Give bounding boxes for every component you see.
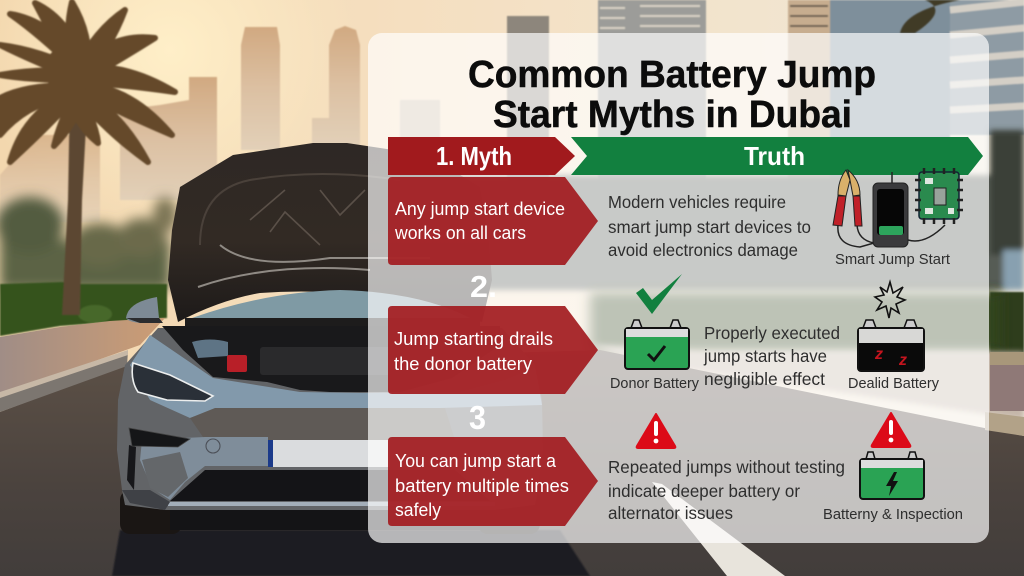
- upper blue panel: [130, 335, 542, 418]
- icon: smart jump starter with clamps and chip: [833, 168, 963, 247]
- icon: inspection battery: [860, 452, 924, 499]
- curb left: [0, 351, 128, 412]
- right side towers: [507, 0, 1024, 196]
- truth 2 text: jump starts have: [703, 346, 827, 366]
- truth 3 text: indicate deeper battery or: [608, 481, 800, 501]
- myth 1 card: works on all cars: [394, 223, 526, 243]
- header: myth: [388, 137, 575, 175]
- car with open hood: [117, 143, 543, 534]
- label: donor battery: Donor Battery: [610, 376, 700, 392]
- number 3: 3: [469, 399, 486, 436]
- plate: [268, 440, 390, 467]
- engine bay: [162, 326, 500, 392]
- wiper: [185, 318, 480, 326]
- truth 2 text: negligible effect: [704, 369, 825, 389]
- truth 3 text: [608, 457, 845, 523]
- road: [0, 350, 1024, 576]
- body shell: [117, 328, 543, 510]
- curb right: [985, 412, 1024, 436]
- myth 3 card: You can jump start a: [395, 451, 557, 471]
- truth 1 text: Modern vehicles require: [608, 192, 786, 212]
- truth 1 text: avoid electronics damage: [608, 240, 798, 260]
- header: myth: 1. Myth: [436, 141, 512, 171]
- myth 1 card: [388, 177, 598, 265]
- title: [468, 54, 876, 136]
- myth 3 card: battery multiple times: [395, 476, 569, 496]
- icon: spark: [875, 282, 905, 318]
- header: truth: [571, 137, 983, 175]
- lane line: [652, 482, 785, 576]
- mirror: [126, 297, 163, 323]
- hood lining: [168, 143, 492, 322]
- icon: dead battery: z: [874, 346, 883, 363]
- tyres: [120, 490, 182, 534]
- translucent content panel: [368, 33, 989, 543]
- palm crown and trunk: [0, 2, 175, 315]
- car shadow: [112, 530, 590, 576]
- grille: [170, 470, 490, 501]
- dark mid band: [190, 408, 455, 440]
- hedge: [0, 282, 1024, 353]
- fog light: [129, 428, 190, 447]
- coolant tank: [192, 340, 228, 358]
- headlight: [132, 363, 213, 401]
- icon: dead battery: [858, 320, 924, 371]
- myth 3 card: safely: [395, 500, 441, 520]
- truth 1 text: smart jump start devices to: [608, 217, 811, 237]
- truth 3 text: Repeated jumps without testing: [608, 457, 845, 477]
- myth 1 card: Any jump start device: [395, 199, 565, 219]
- myth 3 card: [388, 437, 598, 526]
- icon: warning left: [637, 414, 675, 448]
- red battery terminal: [227, 355, 247, 372]
- truth 1 text: [608, 192, 811, 260]
- truth 2 text: [703, 323, 840, 389]
- truth 3 text: alternator issues: [608, 503, 733, 523]
- left background palms and trees: [0, 197, 177, 290]
- pavement left: [0, 318, 165, 395]
- icon: green check: [636, 274, 682, 314]
- label: battery inspection: Batterny & Inspection: [823, 507, 963, 523]
- myth 2 card: Jump starting drails: [394, 329, 553, 349]
- pavement right: [590, 345, 1024, 420]
- far hedge under panel: [590, 292, 1000, 352]
- label: dead battery: Dealid Battery: [848, 376, 940, 392]
- skyline towers: [0, 26, 440, 222]
- underbody: [170, 505, 490, 530]
- lower blue panel: [140, 437, 268, 500]
- title: Start Myths in Dubai: [493, 94, 852, 136]
- right background trees: [430, 130, 1024, 290]
- truth 2 text: Properly executed: [704, 323, 840, 343]
- fog vent: [127, 445, 136, 490]
- windscreen: [192, 290, 470, 318]
- lower lip: [168, 502, 495, 506]
- title: Common Battery Jump: [468, 54, 876, 96]
- number 2: 2.: [470, 269, 497, 304]
- myth 2 card: the donor battery: [394, 354, 532, 374]
- label: smart jump start: Smart Jump Start: [835, 252, 950, 268]
- icon: warning right: [872, 413, 910, 447]
- myth 2 card: [388, 306, 598, 394]
- icon: dead battery: z: [898, 352, 907, 369]
- icon: donor battery: [625, 320, 689, 369]
- top right palm: [900, 0, 960, 33]
- header: truth: Truth: [744, 141, 805, 171]
- engine cover: [260, 347, 430, 375]
